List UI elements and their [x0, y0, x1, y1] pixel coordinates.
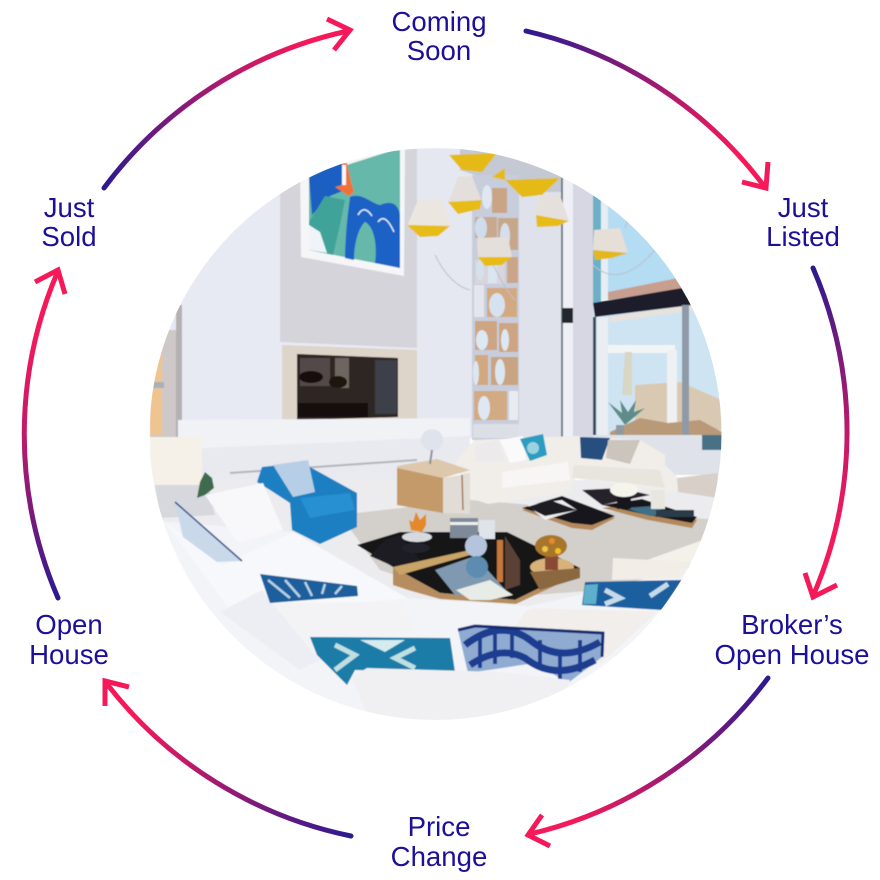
white cushion left: [205, 482, 282, 530]
label: Price Change: Change: [391, 841, 487, 872]
label: Broker's Open House: Broker’s: [741, 609, 843, 640]
label: Just Sold: Sold: [41, 221, 97, 252]
orange coral decor: [402, 512, 432, 553]
floor lamp: [150, 437, 202, 485]
orange bouquet on gold tray: [530, 535, 580, 590]
label: Open House: Open: [35, 609, 103, 640]
cushion front bottom: [363, 667, 570, 684]
arrow: Open House to Just Sold: [24, 270, 65, 598]
label: Open House: House: [29, 639, 109, 670]
label: Broker's Open House: Open House: [715, 639, 869, 670]
arrow: Broker's Open House to Price Change: [528, 678, 768, 846]
right cushions: [612, 540, 700, 580]
main glass coffee table: [357, 532, 580, 604]
side table with lamp: [397, 429, 470, 514]
label: Coming Soon: Soon: [407, 35, 471, 66]
fireplace ledge and lower wall: [178, 418, 470, 481]
label: Just Listed: Listed: [766, 221, 840, 252]
label: Coming Soon: Coming: [391, 6, 487, 37]
white cushion center: [272, 602, 415, 653]
TV recess: [282, 345, 417, 424]
left wall: [170, 194, 417, 420]
painting: [300, 148, 405, 276]
blue armchair: [257, 465, 357, 544]
label: Price Change: Price: [408, 811, 470, 842]
curtain and column: [519, 178, 593, 438]
light blue pillow: [175, 502, 242, 562]
chair pillow: [273, 460, 315, 497]
teal ikat pillow: [310, 637, 455, 685]
arrow: Price Change to Open House: [105, 681, 351, 836]
television: [297, 354, 398, 420]
arrow: Just Listed to Broker's Open House: [805, 268, 847, 597]
rear coffee tables: [522, 488, 697, 530]
label: Just Sold: Just: [44, 192, 94, 223]
navy patterned pillow back: [260, 574, 358, 603]
floor and rug: [154, 480, 714, 606]
books and sphere decor: [450, 518, 513, 600]
back sofa cushions: [500, 434, 640, 464]
right patterned pillow: [582, 580, 682, 610]
chandelier: [407, 153, 655, 300]
left columns and warm light: [150, 305, 182, 440]
photo: luxury living room in circle: [150, 148, 725, 725]
right cushion behind pillow: [516, 608, 656, 662]
arrow: Coming Soon to Just Listed: [526, 31, 768, 188]
shelving tower: [472, 175, 519, 440]
navy wave pillow: [458, 626, 603, 683]
white flowers and candle: [610, 483, 665, 509]
plant: [197, 472, 214, 498]
window view: [592, 195, 722, 436]
upper shaded ceiling area: [460, 149, 564, 192]
back sofa and ottoman: [455, 435, 723, 504]
right wall section: [417, 148, 473, 438]
textured wall panel: [280, 148, 417, 348]
arrow: Just Sold to Coming Soon: [104, 19, 350, 188]
front white sectional sofa: [164, 522, 686, 710]
label: Just Listed: Just: [778, 192, 828, 223]
